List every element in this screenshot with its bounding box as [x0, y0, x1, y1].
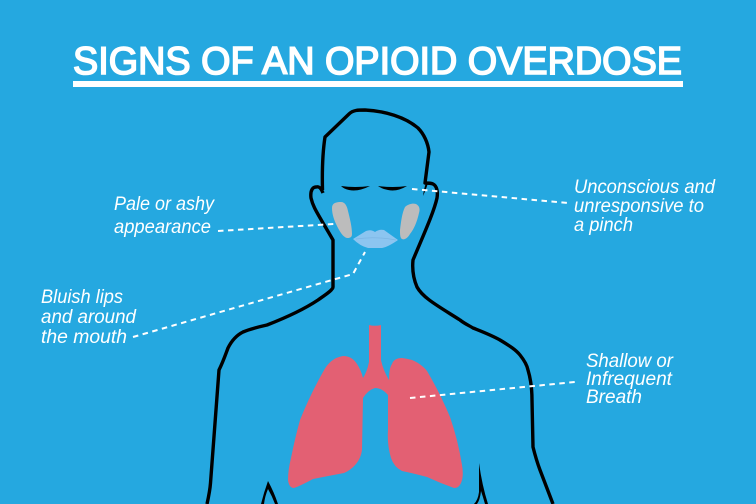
right cheek — [400, 204, 420, 239]
title: SIGNS OF AN OPIOID OVERDOSE — [73, 40, 682, 83]
left inner arm line — [261, 481, 278, 504]
callout: bluish lips — [41, 252, 365, 348]
bluish lips — [353, 230, 398, 248]
left cheek — [332, 202, 352, 238]
lungs and trachea — [288, 325, 463, 488]
callout: unconscious — [412, 177, 716, 236]
callout: unconscious: a pinch — [574, 215, 633, 236]
callout: shallow or infrequent breath — [410, 351, 674, 408]
callout: pale or ashy appearance: Pale or ashy — [114, 194, 215, 215]
right eyelid — [378, 186, 407, 190]
callout: bluish lips: Bluish lips — [41, 287, 123, 308]
body outline figure — [207, 110, 553, 504]
callout: shallow or infrequent breath: Breath — [586, 387, 642, 408]
callout: shallow or infrequent breath: Shallow or — [586, 351, 674, 372]
callout: pale or ashy appearance — [114, 194, 334, 238]
callout: bluish lips: and around — [41, 307, 137, 328]
eyes closed — [341, 186, 407, 190]
callout: shallow or infrequent breath: Infrequent — [586, 369, 673, 390]
callout: unconscious: unresponsive to — [574, 196, 704, 217]
right inner arm line — [474, 463, 488, 504]
callout: bluish lips: the mouth — [41, 327, 127, 348]
callout: pale or ashy appearance: appearance — [114, 217, 211, 238]
ear inner notch — [423, 183, 428, 196]
left eyelid — [341, 186, 370, 190]
callout: unconscious: Unconscious and — [574, 177, 716, 198]
pale cheeks — [332, 202, 420, 239]
head, ears, neck and shoulders outline — [207, 110, 553, 504]
